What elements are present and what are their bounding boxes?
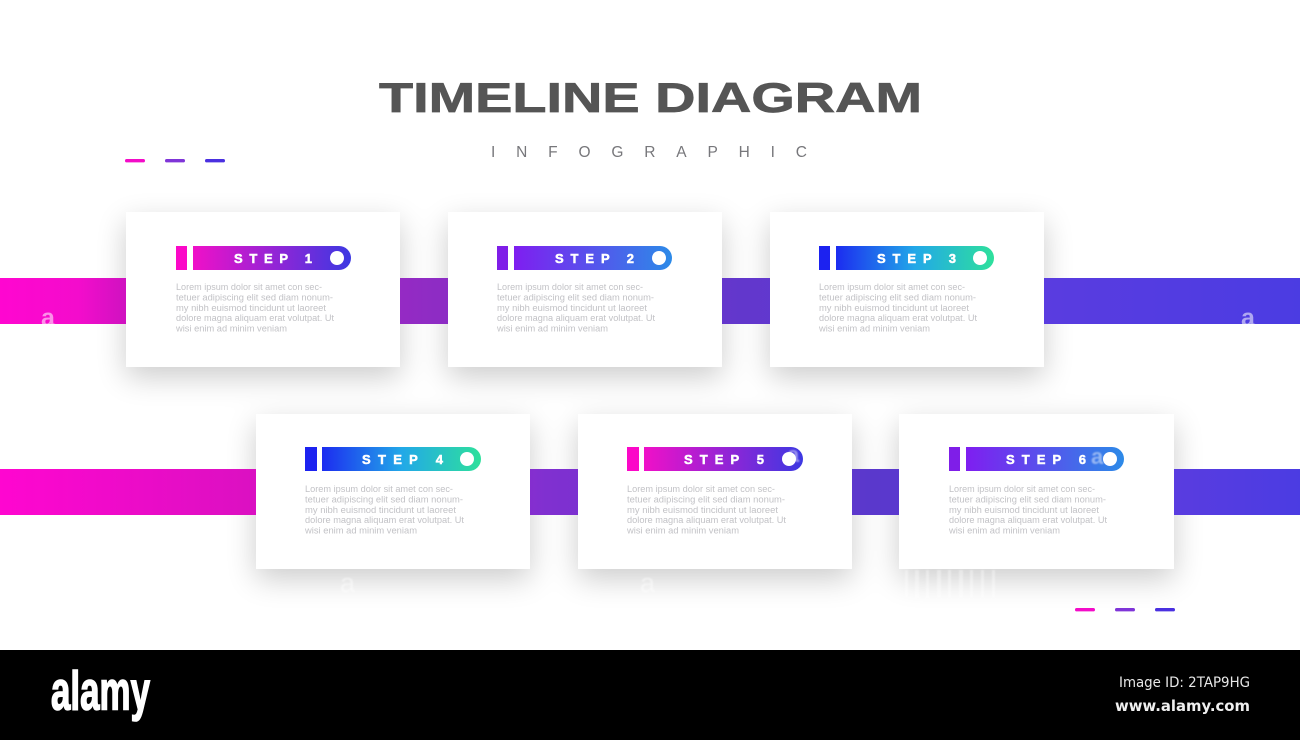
step 5 label: STEP 5 bbox=[684, 452, 764, 467]
step 2 pill bbox=[514, 246, 672, 270]
watermark fragments over pills bbox=[787, 442, 1104, 469]
step 6 dot bbox=[1103, 452, 1117, 466]
step 4 body text: my nibh euismod tincidunt ut laoreet bbox=[305, 505, 457, 515]
step 3 body text: my nibh euismod tincidunt ut laoreet bbox=[819, 303, 970, 313]
step 1 body text: wisi enim ad minim veniam bbox=[175, 324, 287, 334]
step 1 body text: tetuer adipiscing elit sed diam nonum- bbox=[176, 292, 333, 302]
step 6 marker bbox=[949, 447, 960, 471]
watermark fragments over pills: a bbox=[787, 442, 800, 467]
step 2 label: STEP 2 bbox=[555, 251, 634, 266]
watermark bars bbox=[905, 570, 995, 598]
step 6 body text bbox=[948, 484, 1108, 536]
subtitle: INFOGRAPHIC bbox=[491, 144, 807, 161]
step 5 dot bbox=[782, 452, 796, 466]
watermark fragments under cards: a bbox=[640, 568, 656, 598]
card: step 3 bbox=[770, 212, 1044, 367]
card: step 6 bbox=[899, 414, 1174, 569]
step 4 pill bbox=[322, 447, 481, 471]
step 4 dot bbox=[460, 452, 474, 466]
step 2 dot bbox=[652, 251, 666, 265]
step 1 body text: dolore magna aliquam erat volutpat. Ut bbox=[176, 313, 335, 323]
title: TIMELINE DIAGRAM bbox=[379, 74, 922, 121]
step 2 body text: tetuer adipiscing elit sed diam nonum- bbox=[497, 292, 654, 302]
step 6 body text: my nibh euismod tincidunt ut laoreet bbox=[949, 505, 1100, 515]
step 5 body text: Lorem ipsum dolor sit amet con sec- bbox=[627, 484, 775, 494]
step 4 body text: wisi enim ad minim veniam bbox=[304, 526, 417, 536]
step 4 body text: dolore magna aliquam erat volutpat. Ut bbox=[305, 515, 465, 525]
card: step 1 bbox=[126, 212, 400, 367]
timeline band: row 2 bbox=[0, 469, 1300, 515]
step 3 dot bbox=[973, 251, 987, 265]
step 4 body text: Lorem ipsum dolor sit amet con sec- bbox=[305, 484, 453, 494]
watermark fragments on band: a bbox=[41, 304, 56, 332]
card: step 2 bbox=[448, 212, 722, 367]
step 2 body text: Lorem ipsum dolor sit amet con sec- bbox=[497, 282, 643, 292]
step 5 body text: my nibh euismod tincidunt ut laoreet bbox=[627, 505, 779, 515]
step 1 label: STEP 1 bbox=[234, 251, 312, 266]
image id: Image ID: 2TAP9HG bbox=[1119, 675, 1250, 691]
decorative dashes: top left bbox=[125, 159, 225, 162]
step 2 body text bbox=[496, 282, 656, 334]
step 1 body text: my nibh euismod tincidunt ut laoreet bbox=[176, 303, 327, 313]
step 6 body text: wisi enim ad minim veniam bbox=[948, 526, 1060, 536]
card: step 5 bbox=[578, 414, 852, 569]
watermark fragments under cards bbox=[340, 568, 656, 598]
step 5 pill bbox=[644, 447, 803, 471]
footer bar bbox=[0, 650, 1300, 740]
step 2 body text: my nibh euismod tincidunt ut laoreet bbox=[497, 303, 648, 313]
footer logo: alamy bbox=[51, 660, 150, 722]
step 3 body text: Lorem ipsum dolor sit amet con sec- bbox=[819, 282, 965, 292]
decorative dashes: bottom right bbox=[1075, 608, 1175, 611]
step 3 body text: tetuer adipiscing elit sed diam nonum- bbox=[819, 292, 976, 302]
watermark fragments on band bbox=[42, 312, 1256, 324]
timeline band: row 1 bbox=[0, 278, 1300, 324]
watermark fragments on band: a bbox=[1241, 304, 1256, 332]
watermark fragments under cards: a bbox=[340, 568, 356, 598]
step 2 body text: wisi enim ad minim veniam bbox=[496, 324, 608, 334]
step 1 body text: Lorem ipsum dolor sit amet con sec- bbox=[176, 282, 322, 292]
step 3 marker bbox=[819, 246, 830, 270]
step 5 body text bbox=[626, 484, 787, 536]
step 5 marker bbox=[627, 447, 639, 471]
step 3 body text: dolore magna aliquam erat volutpat. Ut bbox=[819, 313, 978, 323]
step 3 label: STEP 3 bbox=[877, 251, 956, 266]
step 6 label: STEP 6 bbox=[1006, 452, 1086, 467]
step 4 label: STEP 4 bbox=[362, 452, 444, 467]
step 2 body text: dolore magna aliquam erat volutpat. Ut bbox=[497, 313, 656, 323]
watermark fragments over pills: a bbox=[1091, 444, 1104, 469]
step 5 body text: dolore magna aliquam erat volutpat. Ut bbox=[627, 515, 787, 525]
step 3 pill bbox=[836, 246, 994, 270]
step 5 body text: tetuer adipiscing elit sed diam nonum- bbox=[627, 494, 785, 504]
step 6 body text: dolore magna aliquam erat volutpat. Ut bbox=[949, 515, 1108, 525]
step 6 body text: tetuer adipiscing elit sed diam nonum- bbox=[949, 494, 1106, 504]
step 4 marker bbox=[305, 447, 317, 471]
step 3 body text: wisi enim ad minim veniam bbox=[818, 324, 930, 334]
step 4 body text bbox=[304, 484, 465, 536]
step 3 body text bbox=[818, 282, 978, 334]
card: step 4 bbox=[256, 414, 530, 569]
card shadows bbox=[126, 222, 1174, 579]
step 1 pill bbox=[193, 246, 351, 270]
step 1 dot bbox=[330, 251, 344, 265]
step 5 body text: wisi enim ad minim veniam bbox=[626, 526, 739, 536]
step 6 pill bbox=[966, 447, 1124, 471]
step 1 body text bbox=[175, 282, 335, 334]
step 6 body text: Lorem ipsum dolor sit amet con sec- bbox=[949, 484, 1095, 494]
step 1 marker bbox=[176, 246, 187, 270]
step 4 body text: tetuer adipiscing elit sed diam nonum- bbox=[305, 494, 463, 504]
footer url: www.alamy.com bbox=[1115, 697, 1250, 715]
step 2 marker bbox=[497, 246, 508, 270]
